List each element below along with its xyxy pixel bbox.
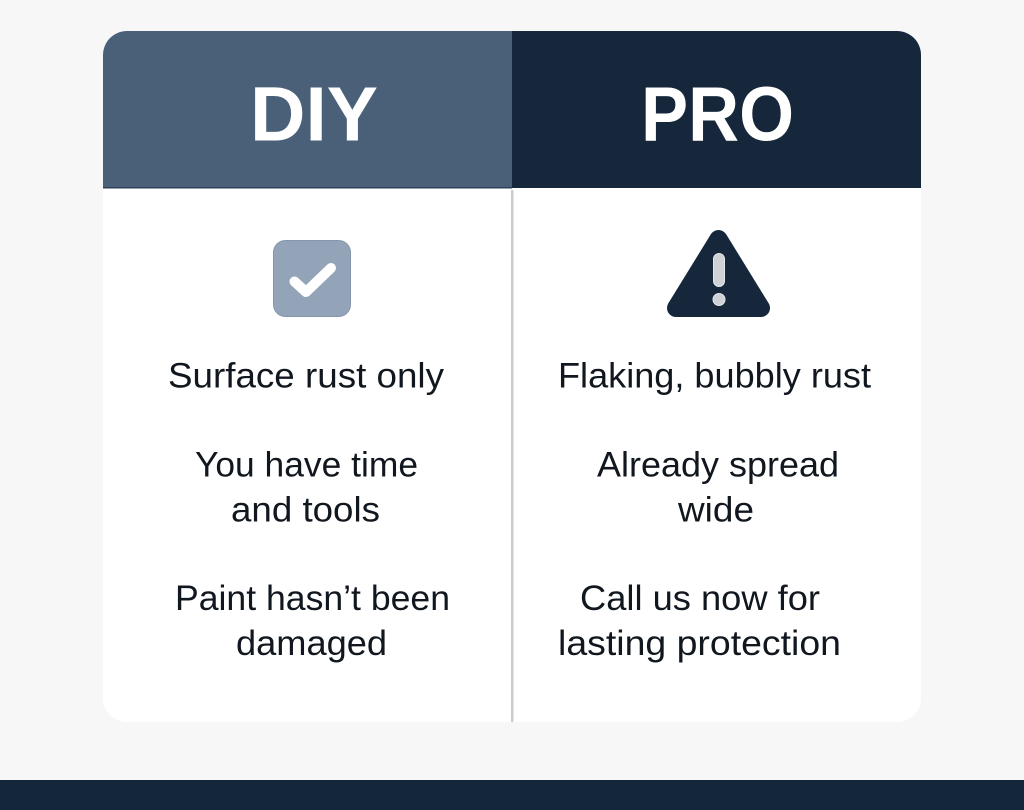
text: already spread wide: wide — [677, 490, 754, 530]
text: already spread wide — [597, 446, 839, 530]
text: paint hasn't been damaged — [175, 579, 450, 663]
panel: DIY column — [168, 240, 450, 663]
text: call us now — [558, 579, 841, 663]
text: already spread wide: Already spread — [597, 446, 839, 484]
text: you have time and tools: and tools — [231, 490, 380, 530]
panel: PRO header — [512, 31, 921, 188]
text: surface rust only: Surface rust only — [168, 356, 445, 396]
comparison card — [103, 31, 921, 722]
text: paint hasn't been damaged: Paint hasn’t been — [175, 579, 450, 618]
text: call us now: Call us now for — [580, 579, 820, 618]
footer bar — [0, 780, 1024, 810]
icon: warning triangle — [676, 239, 761, 308]
text: you have time and tools: You have time — [195, 446, 418, 484]
panel: PRO column — [558, 239, 871, 663]
text: paint hasn't been damaged: damaged — [236, 624, 387, 663]
text: you have time and tools — [195, 446, 418, 530]
heading: PRO: PRO — [641, 72, 794, 158]
text: call us now: lasting protection — [558, 624, 841, 663]
icon: check mark box — [274, 240, 350, 316]
heading: DIY: DIY — [250, 72, 378, 158]
panel: DIY header — [103, 31, 512, 188]
text: flaking, bubbly rust: Flaking, bubbly rust — [558, 356, 871, 396]
